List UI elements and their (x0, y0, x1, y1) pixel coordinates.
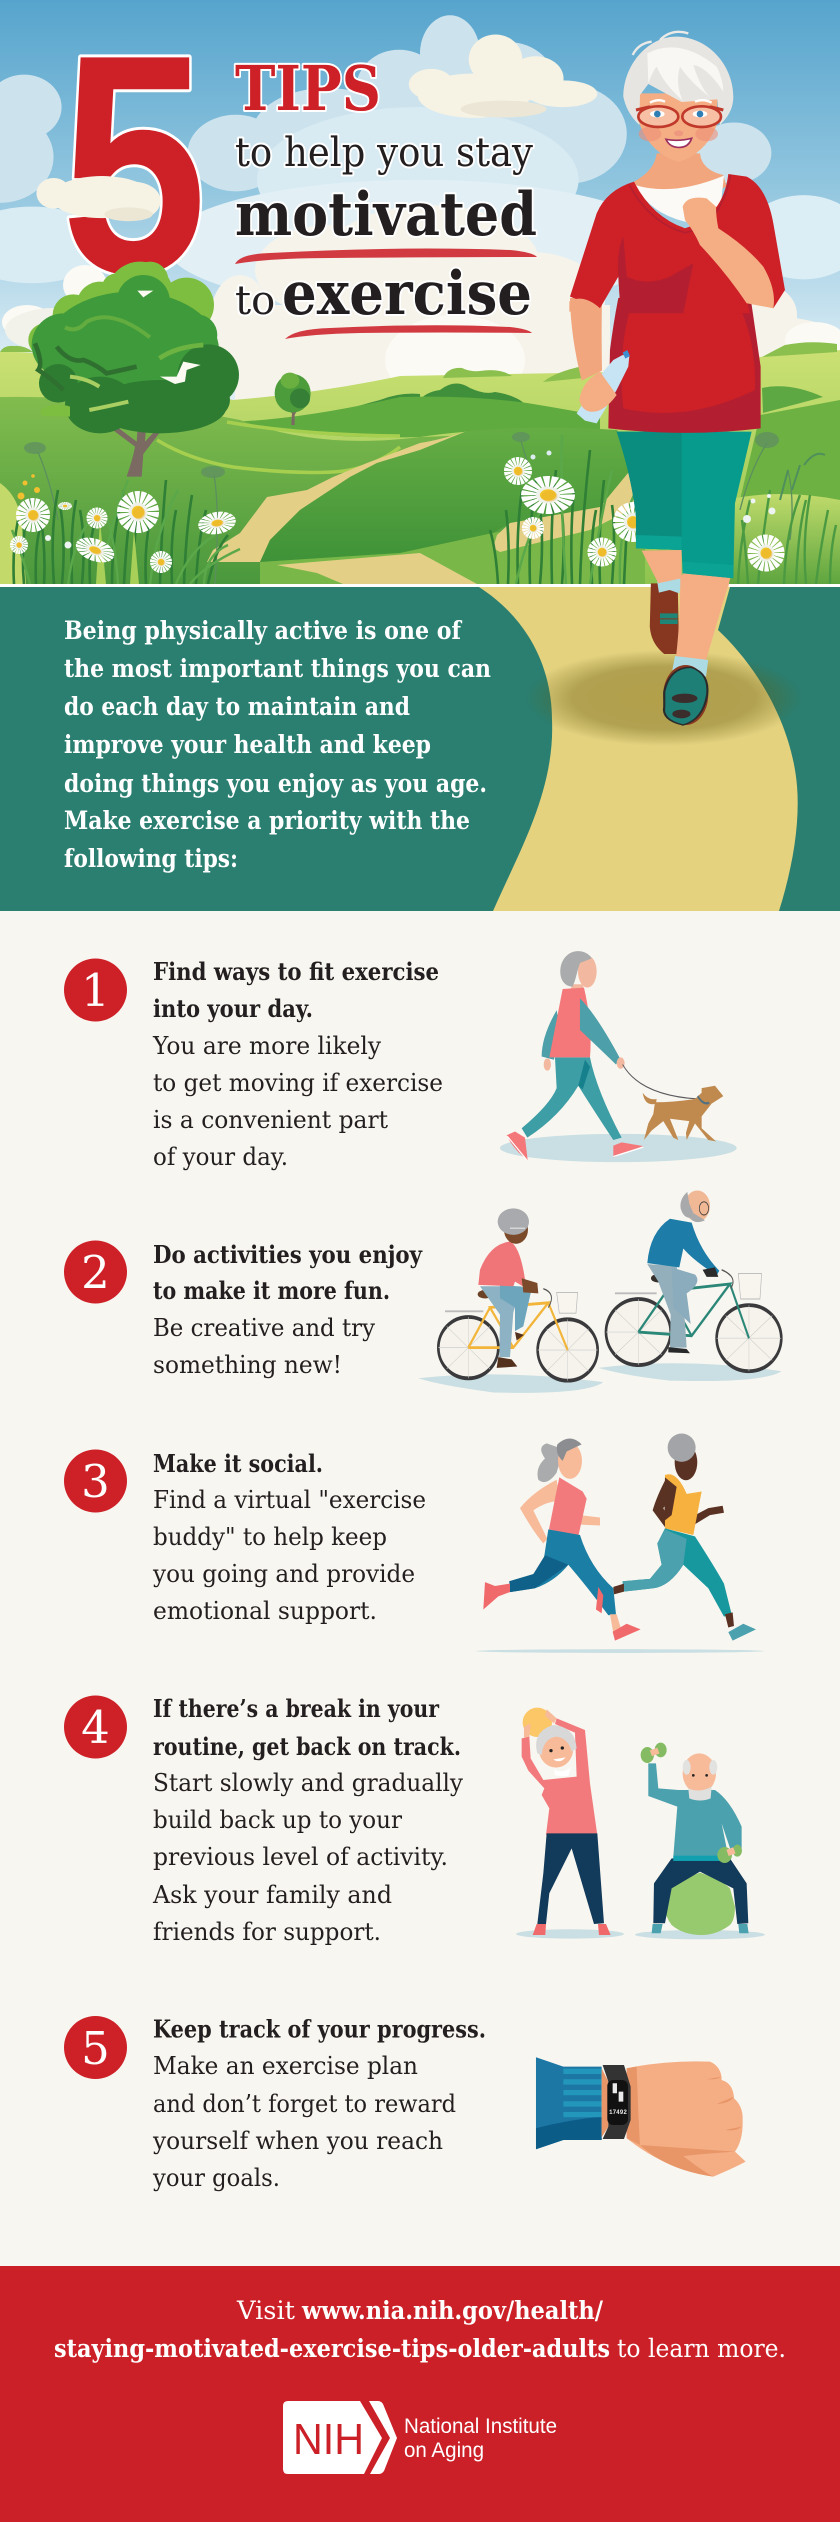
illustration: two older adults cycling (418, 1190, 782, 1393)
tip 2 (64, 1190, 782, 1393)
tip 2 text: Be creative and try (153, 1314, 375, 1342)
title line: motivated: motivated (235, 180, 537, 250)
hill: front hill over trail (260, 428, 645, 562)
woman jogging with water bottle (569, 32, 785, 725)
badge 2 (64, 1240, 127, 1304)
title word: exercise: exercise (282, 259, 532, 329)
badge 4 (64, 1696, 127, 1758)
footer text: Visit (236, 2296, 295, 2325)
tip 5 text: and don’t forget to reward (153, 2090, 456, 2118)
trail: sand path in meadow (207, 431, 467, 562)
tip 4 text: previous level of activity. (153, 1843, 448, 1871)
hills: mid ground ridge (227, 397, 600, 437)
woman: head, hair and glasses (623, 32, 733, 162)
tip 5 text: Make an exercise plan (153, 2052, 418, 2080)
NIH wordmark: National Institute (404, 2415, 557, 2438)
woman: lower torso and water bottle (570, 298, 761, 433)
tip 4 text: If there’s a break in your (153, 1694, 439, 1723)
cloud: top right cream cloud (409, 34, 597, 118)
badge 3 (64, 1450, 127, 1512)
woman stretching (523, 1708, 552, 1737)
NIH logo (283, 2401, 397, 2474)
NIH logo: NIH (293, 2415, 364, 2464)
intro text: Being physically active is one of (64, 616, 463, 645)
foot shadow (524, 650, 804, 746)
tip 2 text: something new! (153, 1351, 342, 1379)
tip 5 text: yourself when you reach (152, 2127, 443, 2155)
intro text (64, 616, 491, 873)
flowers: buttercups and buds (18, 450, 776, 548)
title line: TIPS: TIPS (235, 52, 381, 125)
woman: lower legs and shoes (650, 575, 731, 725)
clouds: pale sky clouds (0, 15, 840, 310)
tip 1 text: to get moving if exercise (153, 1069, 443, 1097)
intro band (0, 584, 840, 911)
tree: small distant tree (275, 373, 311, 425)
footer text: www.nia.nih.gov/health/ (301, 2296, 604, 2325)
illustration: woman walking dog (500, 951, 737, 1162)
second runner (653, 1477, 677, 1529)
tip 4 text: friends for support. (153, 1918, 381, 1946)
badge 1 (64, 958, 127, 1022)
tip 4 text: routine, get back on track. (153, 1732, 461, 1761)
tip 2 text: Do activities you enjoy (153, 1240, 423, 1269)
trail on intro band (479, 587, 798, 911)
title line: to exercise: to (235, 278, 275, 324)
footer text (54, 2296, 786, 2363)
man on ball with dumbbells (665, 1873, 735, 1935)
intro text: doing things you enjoy as you age. (64, 769, 487, 798)
badge 5 (64, 2016, 127, 2079)
woman: capri pants and upper legs (617, 432, 752, 587)
footer text: staying-motivated-exercise-tips-older-adults (54, 2334, 610, 2363)
red underline swoosh 2 (285, 325, 532, 339)
woman: upper body and arm (569, 153, 785, 313)
hills: far pale hills and bushes (0, 342, 840, 584)
intro text: do each day to maintain and (64, 692, 410, 721)
badge 3: 3 (81, 1455, 110, 1508)
first runner (537, 1443, 563, 1482)
tip 5 text: Keep track of your progress. (153, 2014, 486, 2044)
hill: lower ground (260, 510, 645, 584)
tip 3 text: emotional support. (153, 1597, 377, 1625)
hero scene: sky and landscape (0, 0, 840, 584)
tip 1 text (152, 957, 443, 1171)
intro text: following tips: (64, 844, 238, 873)
tip 4 text: Ask your family and (152, 1881, 392, 1909)
tip 2 text (153, 1240, 423, 1379)
tip 3 text: Make it social. (153, 1449, 323, 1478)
red underline swoosh 1 (235, 249, 537, 264)
badge 2: 2 (81, 1246, 110, 1299)
tip 2 text: to make it more fun. (153, 1276, 390, 1305)
trail: sand segments near woman (277, 473, 640, 584)
NIH wordmark: on Aging (404, 2439, 484, 2462)
intro text: improve your health and keep (64, 730, 431, 759)
tip 4 (64, 1694, 765, 1946)
cloud: small cloud crossing the 5 (36, 176, 161, 221)
title line: to help you stay: to help you stay (235, 130, 533, 176)
title: hero heading (235, 52, 537, 339)
tip 3 text: you going and provide (152, 1560, 415, 1588)
large number 5: 5 (61, 0, 207, 339)
tip 1 text: is a convenient part (153, 1106, 388, 1134)
intro text: the most important things you can (64, 654, 491, 683)
clouds: cream clouds behind title (2, 205, 840, 405)
badge 5: 5 (81, 2022, 110, 2075)
tip 1 text: of your day. (153, 1143, 288, 1171)
intro text: Make exercise a priority with the (64, 806, 470, 835)
tip 4 text: build back up to your (153, 1806, 403, 1834)
tip 3 text: Find a virtual "exercise (153, 1486, 426, 1514)
tip 4 text: Start slowly and gradually (153, 1769, 463, 1797)
meadow highlight: lime stripes (157, 422, 400, 472)
tip 5 (64, 2014, 746, 2192)
hills: main meadow (0, 397, 610, 584)
illustration: wrist with fitness tracker (536, 2057, 746, 2177)
tip 1 (64, 951, 737, 1171)
tip 1 text: Find ways to fit exercise (153, 957, 439, 986)
hill: pale right foreground hill (725, 494, 840, 584)
tip 5 text (152, 2014, 486, 2192)
grass: foreground grass blades (12, 435, 836, 584)
hill: pale left foreground corner (0, 483, 26, 584)
footer band (0, 2266, 840, 2522)
badge 4: 4 (81, 1701, 110, 1754)
woman's bicycle (438, 1289, 598, 1381)
NIH wordmark (404, 2415, 557, 2462)
illustration: wrist with fitness tracker: 17492 (609, 2109, 627, 2116)
tip 4 text (152, 1694, 463, 1946)
footer text: to learn more. (617, 2334, 786, 2363)
badge 1: 1 (81, 964, 110, 1017)
tip 3 text: buddy" to help keep (153, 1523, 387, 1551)
man's bicycle (606, 1270, 781, 1371)
tip 1 text: You are more likely (152, 1032, 381, 1060)
illustration: woman stretching with ball and man on exercise ball (516, 1708, 765, 1939)
tip 3 (64, 1434, 764, 1653)
tip 3 text (152, 1449, 426, 1625)
plants: seed heads and wild stems (24, 432, 792, 584)
illustration: two women running (476, 1434, 764, 1653)
dog (643, 1086, 723, 1141)
tree: large tree (28, 262, 239, 477)
flowers: daisies (13, 462, 777, 569)
tip 1 text: into your day. (153, 994, 313, 1023)
tip 5 text: your goals. (152, 2164, 280, 2192)
